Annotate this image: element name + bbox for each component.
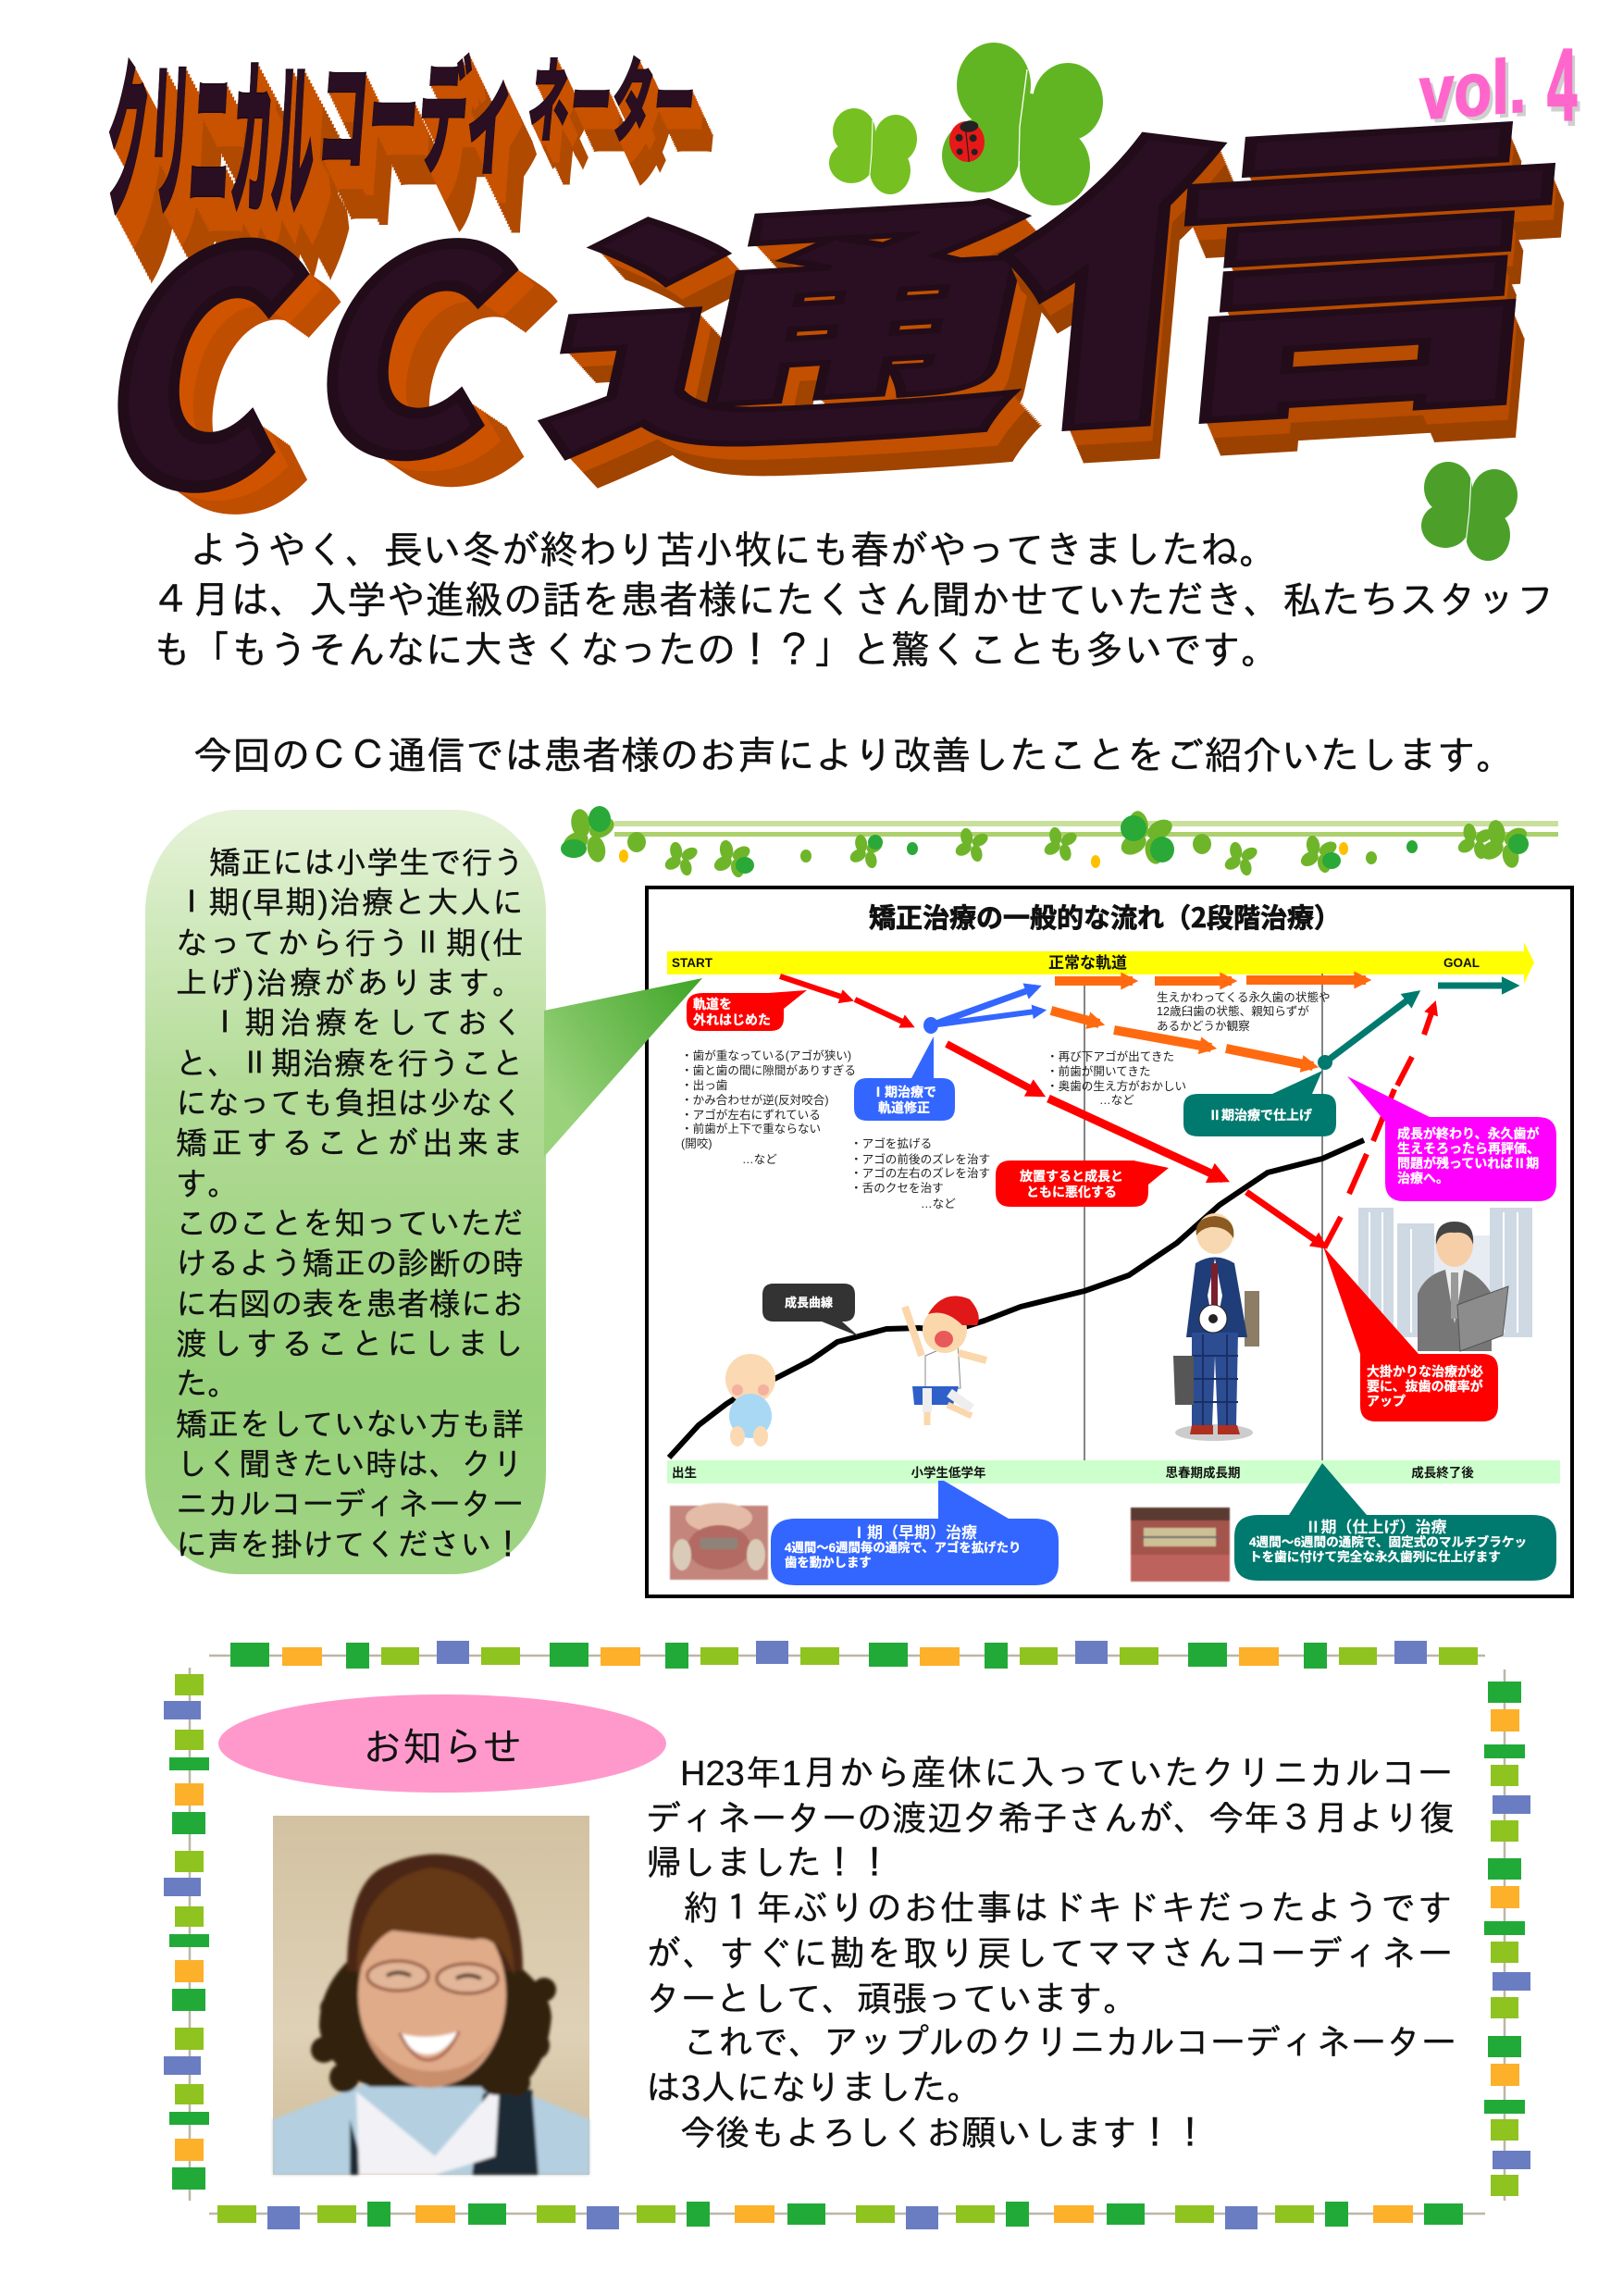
heading: お知らせ <box>218 1694 666 1793</box>
intro text: 今回のＣＣ通信では患者様のお声により改善したことをご紹介いたします。 <box>193 734 1515 777</box>
yellow axis arrow: START <box>672 956 713 970</box>
text: に右図の表を患者様にお <box>176 1287 524 1322</box>
red arrows: off course <box>780 976 1323 1246</box>
text: けるよう矯正の診断の時 <box>176 1247 524 1282</box>
list: relapse signs: …など <box>1099 1094 1134 1107</box>
age band: 成長終了後 <box>1411 1465 1474 1480</box>
notice text <box>646 1755 1456 2153</box>
list: phase 1 work: …など <box>921 1198 956 1210</box>
yellow axis arrow: 正常な軌道 <box>1048 954 1127 972</box>
intro text: ４月は、入学や進級の話を患者様にたくさん聞かせていただき、私たちスタッフ <box>153 578 1555 622</box>
list: left symptoms: ・歯が重なっている(アゴが狭い) <box>681 1049 851 1062</box>
decoration: clover strip <box>560 806 1558 878</box>
list: relapse signs: ・再び下アゴが出てきた <box>1047 1049 1174 1063</box>
list: left symptoms: …など <box>742 1153 777 1166</box>
list: phase 1 work: ・舌のクセを治す <box>850 1182 944 1195</box>
note: observation: 生えかわってくる永久歯の状態や <box>1157 991 1331 1004</box>
text: 帰しました！！ <box>646 1844 892 1883</box>
callout: phase 1 description <box>771 1481 1059 1585</box>
list: phase 1 work <box>850 1136 990 1210</box>
list: left symptoms: ・アゴが左右にずれている <box>681 1108 821 1122</box>
callout: extraction risk <box>1323 1247 1498 1421</box>
callout: phase 2 description: Ⅱ期（仕上げ）治療 <box>1305 1519 1447 1536</box>
callout: extraction risk: 大掛かりな治療が必 <box>1367 1364 1483 1379</box>
badge: vol.4 <box>1419 28 1580 143</box>
illustration: baby <box>725 1354 775 1446</box>
title: CC通信: C <box>280 133 553 531</box>
list: phase 1 work: ・アゴの前後のズレを治す <box>850 1152 990 1166</box>
text: Ⅰ期治療をしておく <box>209 1006 524 1041</box>
photo: braces <box>1131 1508 1230 1582</box>
callout: worsens <box>996 1160 1169 1207</box>
callout: re-evaluate: 治療へ。 <box>1397 1171 1449 1185</box>
list: left symptoms: ・前歯が上下で重ならない <box>681 1122 821 1136</box>
badge: vol.4: 4 <box>1547 28 1577 143</box>
callout: phase 2 finish <box>1183 1071 1336 1136</box>
callout: off track: 外れはじめた <box>693 1012 771 1027</box>
callout: phase 2 description: トを歯に付けて完全な永久歯列に仕上げます <box>1249 1549 1501 1564</box>
text: ニカルコーディネーター <box>176 1487 524 1522</box>
callout: phase 2 finish: Ⅱ期治療で仕上げ <box>1208 1108 1312 1123</box>
note: observation: 12歳臼歯の状態、親知らずが <box>1157 1005 1309 1018</box>
text: なってから行うⅡ期(仕 <box>176 926 524 962</box>
title: CC通信: 通 <box>518 114 1080 511</box>
teal arrows <box>1318 986 1514 1070</box>
text: 約１年ぶりのお仕事はドキドキだったようです <box>683 1890 1453 1929</box>
callout: phase 1 description: Ⅰ期（早期）治療 <box>851 1524 977 1542</box>
orange arrows <box>1051 980 1366 1066</box>
speech bubble: green <box>145 810 546 1574</box>
list: relapse signs: ・前歯が開いてきた <box>1047 1064 1151 1078</box>
illustration: business man <box>1358 1208 1532 1351</box>
list: left symptoms <box>681 1049 856 1166</box>
callout: phase 2 description <box>1234 1463 1556 1581</box>
callout: phase 1 correction <box>854 1036 955 1121</box>
age band: 思春期成長期 <box>1166 1465 1240 1480</box>
title: クリニカルコーディネーター: コーディ <box>313 18 523 197</box>
stage dividers <box>1084 974 1322 1460</box>
text: 矯正することが出来ま <box>176 1126 524 1161</box>
title: CC通信: 信 <box>979 18 1575 493</box>
note: observation: あるかどうか観察 <box>1157 1020 1250 1033</box>
text: Ⅰ期(早期)治療と大人に <box>176 886 524 921</box>
callout: re-evaluate: 成長が終わり、永久歯が <box>1397 1126 1539 1141</box>
callout: worsens: 放置すると成長と <box>1020 1169 1123 1184</box>
text: に声を掛けてください！ <box>176 1528 524 1563</box>
yellow axis arrow <box>667 942 1534 984</box>
title: クリニカルコーディネーター: クリニカル <box>101 3 322 252</box>
note: observation <box>1157 991 1331 1033</box>
icon: ladybug <box>948 119 986 164</box>
callout: growth curve <box>762 1284 859 1336</box>
clover: large with ladybug <box>942 43 1103 205</box>
list: phase 1 work: ・アゴを拡げる <box>850 1136 932 1150</box>
text: 今後もよろしくお願いします！！ <box>680 2115 1208 2153</box>
callout: phase 1 correction: 軌道修正 <box>878 1100 930 1115</box>
bubble text <box>176 846 525 1563</box>
callout: phase 1 description: 歯を動かします <box>785 1555 872 1570</box>
list: left symptoms: ・かみ合わせが逆(反対咬合) <box>681 1094 829 1107</box>
yellow axis arrow: GOAL <box>1443 956 1480 970</box>
age band <box>667 1460 1560 1483</box>
panel: treatment flow diagram <box>647 887 1572 1596</box>
text: H23年1月から産休に入っていたクリニカルコー <box>680 1755 1453 1793</box>
title: CC通信: C <box>71 118 344 574</box>
intro text: ようやく、長い冬が終わり苫小牧にも春がやってきましたね。 <box>190 528 1278 572</box>
text: た。 <box>176 1367 239 1402</box>
text: 上げ)治療があります。 <box>176 966 524 1001</box>
callout: off track: 軌道を <box>693 997 732 1011</box>
callout: phase 1 correction: Ⅰ期治療で <box>872 1085 936 1099</box>
text: 矯正をしていない方も詳 <box>176 1408 524 1443</box>
growth curve <box>669 1140 1364 1458</box>
text: す。 <box>176 1167 239 1202</box>
age band: 小学生低学年 <box>911 1465 986 1480</box>
callout: extraction risk: アップ <box>1367 1394 1406 1409</box>
callout: re-evaluate <box>1347 1076 1556 1201</box>
callout: extraction risk: 要に、抜歯の確率が <box>1367 1379 1483 1394</box>
list: left symptoms: (開咬) <box>681 1137 712 1150</box>
title: クリニカルコーディネーター: ネーター <box>523 27 702 161</box>
intro text: も「もうそんなに大きくなったの！？」と驚くことも多いです。 <box>153 628 1280 672</box>
list: left symptoms: ・出っ歯 <box>681 1079 727 1092</box>
callout: re-evaluate: 生えそろったら再評価、 <box>1397 1141 1540 1156</box>
title: クリニカルコーディネーター <box>101 3 713 283</box>
list: phase 1 work: ・アゴの左右のズレを治す <box>850 1166 990 1180</box>
illustration: child <box>905 1296 986 1425</box>
list: left symptoms: ・歯と歯の間に隙間がありすぎる <box>681 1064 856 1077</box>
photo: staff portrait <box>273 1816 589 2175</box>
callout: worsens: ともに悪化する <box>1026 1185 1117 1199</box>
callout: phase 2 description: 4週間～6週間の通院で、固定式のマルチブラケッ <box>1249 1534 1527 1549</box>
intro text <box>153 528 1555 777</box>
dashed red arrow to goal <box>1325 1005 1434 1247</box>
text: が、すぐに勘を取り戻してママさんコーディネー <box>646 1935 1453 1974</box>
frame: colored block border <box>164 1641 1530 2229</box>
clover: small top <box>829 108 917 194</box>
text: しく聞きたい時は、クリ <box>176 1447 524 1483</box>
text: ディネーターの渡辺夕希子さんが、今年３月より復 <box>646 1800 1455 1839</box>
clover: bottom right <box>1421 462 1518 561</box>
text: 渡しすることにしまし <box>176 1327 524 1362</box>
callout: growth curve: 成長曲線 <box>785 1296 833 1309</box>
text: これで、アップルのクリニカルコーディネーター <box>683 2024 1456 2063</box>
text: このことを知っていただ <box>176 1207 524 1242</box>
callout: phase 1 description: 4週間～6週間毎の通院で、アゴを拡げたり <box>785 1540 1021 1555</box>
callout: re-evaluate: 問題が残っていればⅡ期 <box>1397 1156 1539 1171</box>
diagram title: 矯正治療の一般的な流れ（2段階治療） <box>869 897 1341 936</box>
illustration: student <box>1173 1213 1259 1441</box>
title: CC通信 <box>71 18 1575 574</box>
photo: upper teeth appliance <box>670 1503 768 1580</box>
heading: お知らせ: お知らせ <box>363 1727 522 1767</box>
age band: 出生 <box>672 1466 697 1480</box>
text: は3人になりました。 <box>646 2069 982 2108</box>
list: relapse signs <box>1047 1049 1186 1107</box>
speech bubble tail <box>544 978 702 1157</box>
text: になっても負担は少なく <box>176 1086 524 1122</box>
badge: vol.4: vol. <box>1419 43 1526 136</box>
blue arrows <box>923 987 1042 1034</box>
text: ターとして、頑張っています。 <box>646 1980 1138 2019</box>
text: 矯正には小学生で行う <box>209 846 525 881</box>
text: と、Ⅱ期治療を行うこと <box>176 1047 524 1082</box>
list: relapse signs: ・奥歯の生え方がおかしい <box>1047 1079 1186 1093</box>
callout: off track <box>687 990 807 1031</box>
